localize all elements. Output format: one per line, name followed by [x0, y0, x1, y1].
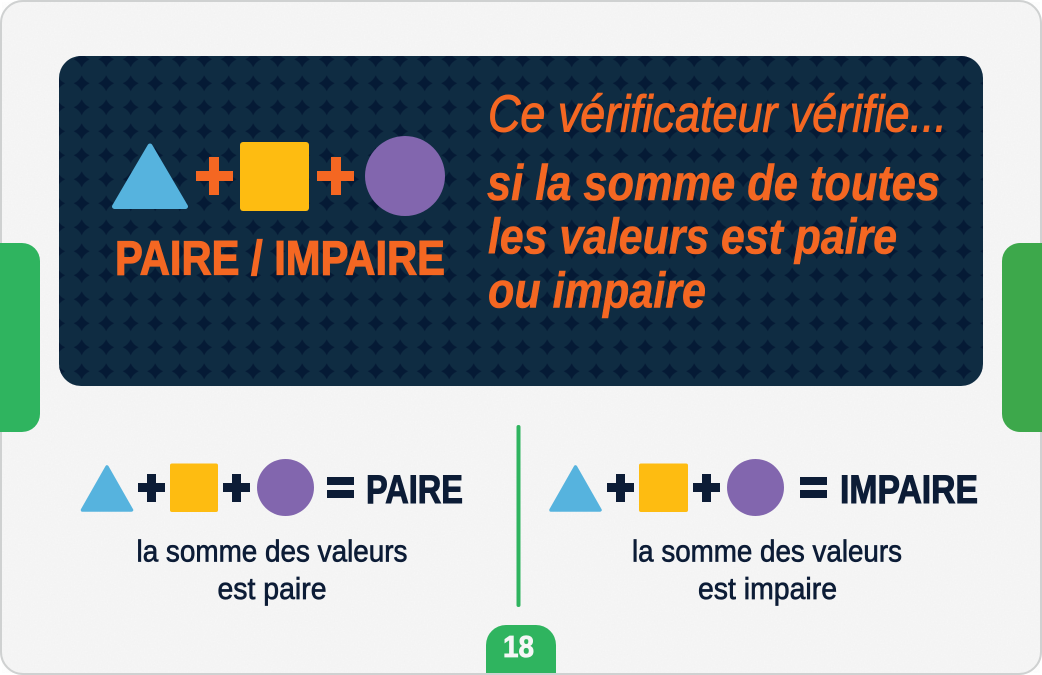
left description — [136, 534, 408, 606]
left description: la somme des valeurs — [136, 534, 408, 568]
icon: navy plus — [138, 474, 165, 502]
label: paire / impaire: PAIRE / IMPAIRE — [115, 232, 445, 286]
top panel — [59, 56, 983, 386]
icon: purple circle — [727, 459, 784, 516]
right green tab — [1002, 243, 1042, 432]
label: paire: PAIRE — [366, 468, 463, 512]
label: impaire: IMPAIRE — [840, 468, 978, 512]
icon: orange plus — [196, 157, 233, 195]
icon: yellow square — [170, 464, 218, 512]
description text — [487, 155, 940, 318]
icon: blue triangle — [551, 467, 600, 510]
icon: blue triangle — [82, 467, 132, 510]
left green tab — [0, 243, 40, 432]
icon: navy plus — [223, 474, 250, 502]
icon: purple circle — [257, 459, 314, 516]
description text: les valeurs est paire — [488, 208, 897, 264]
description text: si la somme de toutes — [487, 155, 940, 211]
icon: navy plus — [607, 474, 634, 502]
icon: yellow square — [240, 142, 309, 211]
center divider — [516, 425, 520, 607]
right description — [632, 534, 902, 606]
icon: orange plus — [317, 157, 354, 195]
icon: navy plus — [693, 474, 720, 502]
left equation — [82, 459, 463, 516]
equals sign — [800, 477, 827, 498]
right description: la somme des valeurs — [632, 534, 902, 568]
left description: est paire — [218, 571, 326, 606]
equals sign — [327, 477, 354, 498]
page number: 18 — [503, 629, 534, 664]
page number tab — [486, 625, 556, 673]
icon: blue triangle — [114, 146, 186, 206]
icon: yellow square — [639, 464, 688, 512]
description text: ou impaire — [488, 262, 706, 318]
heading: Ce vérificateur vérifie... — [488, 86, 947, 144]
icon: purple circle — [365, 136, 445, 216]
right description: est impaire — [698, 571, 837, 606]
right equation — [551, 459, 978, 516]
